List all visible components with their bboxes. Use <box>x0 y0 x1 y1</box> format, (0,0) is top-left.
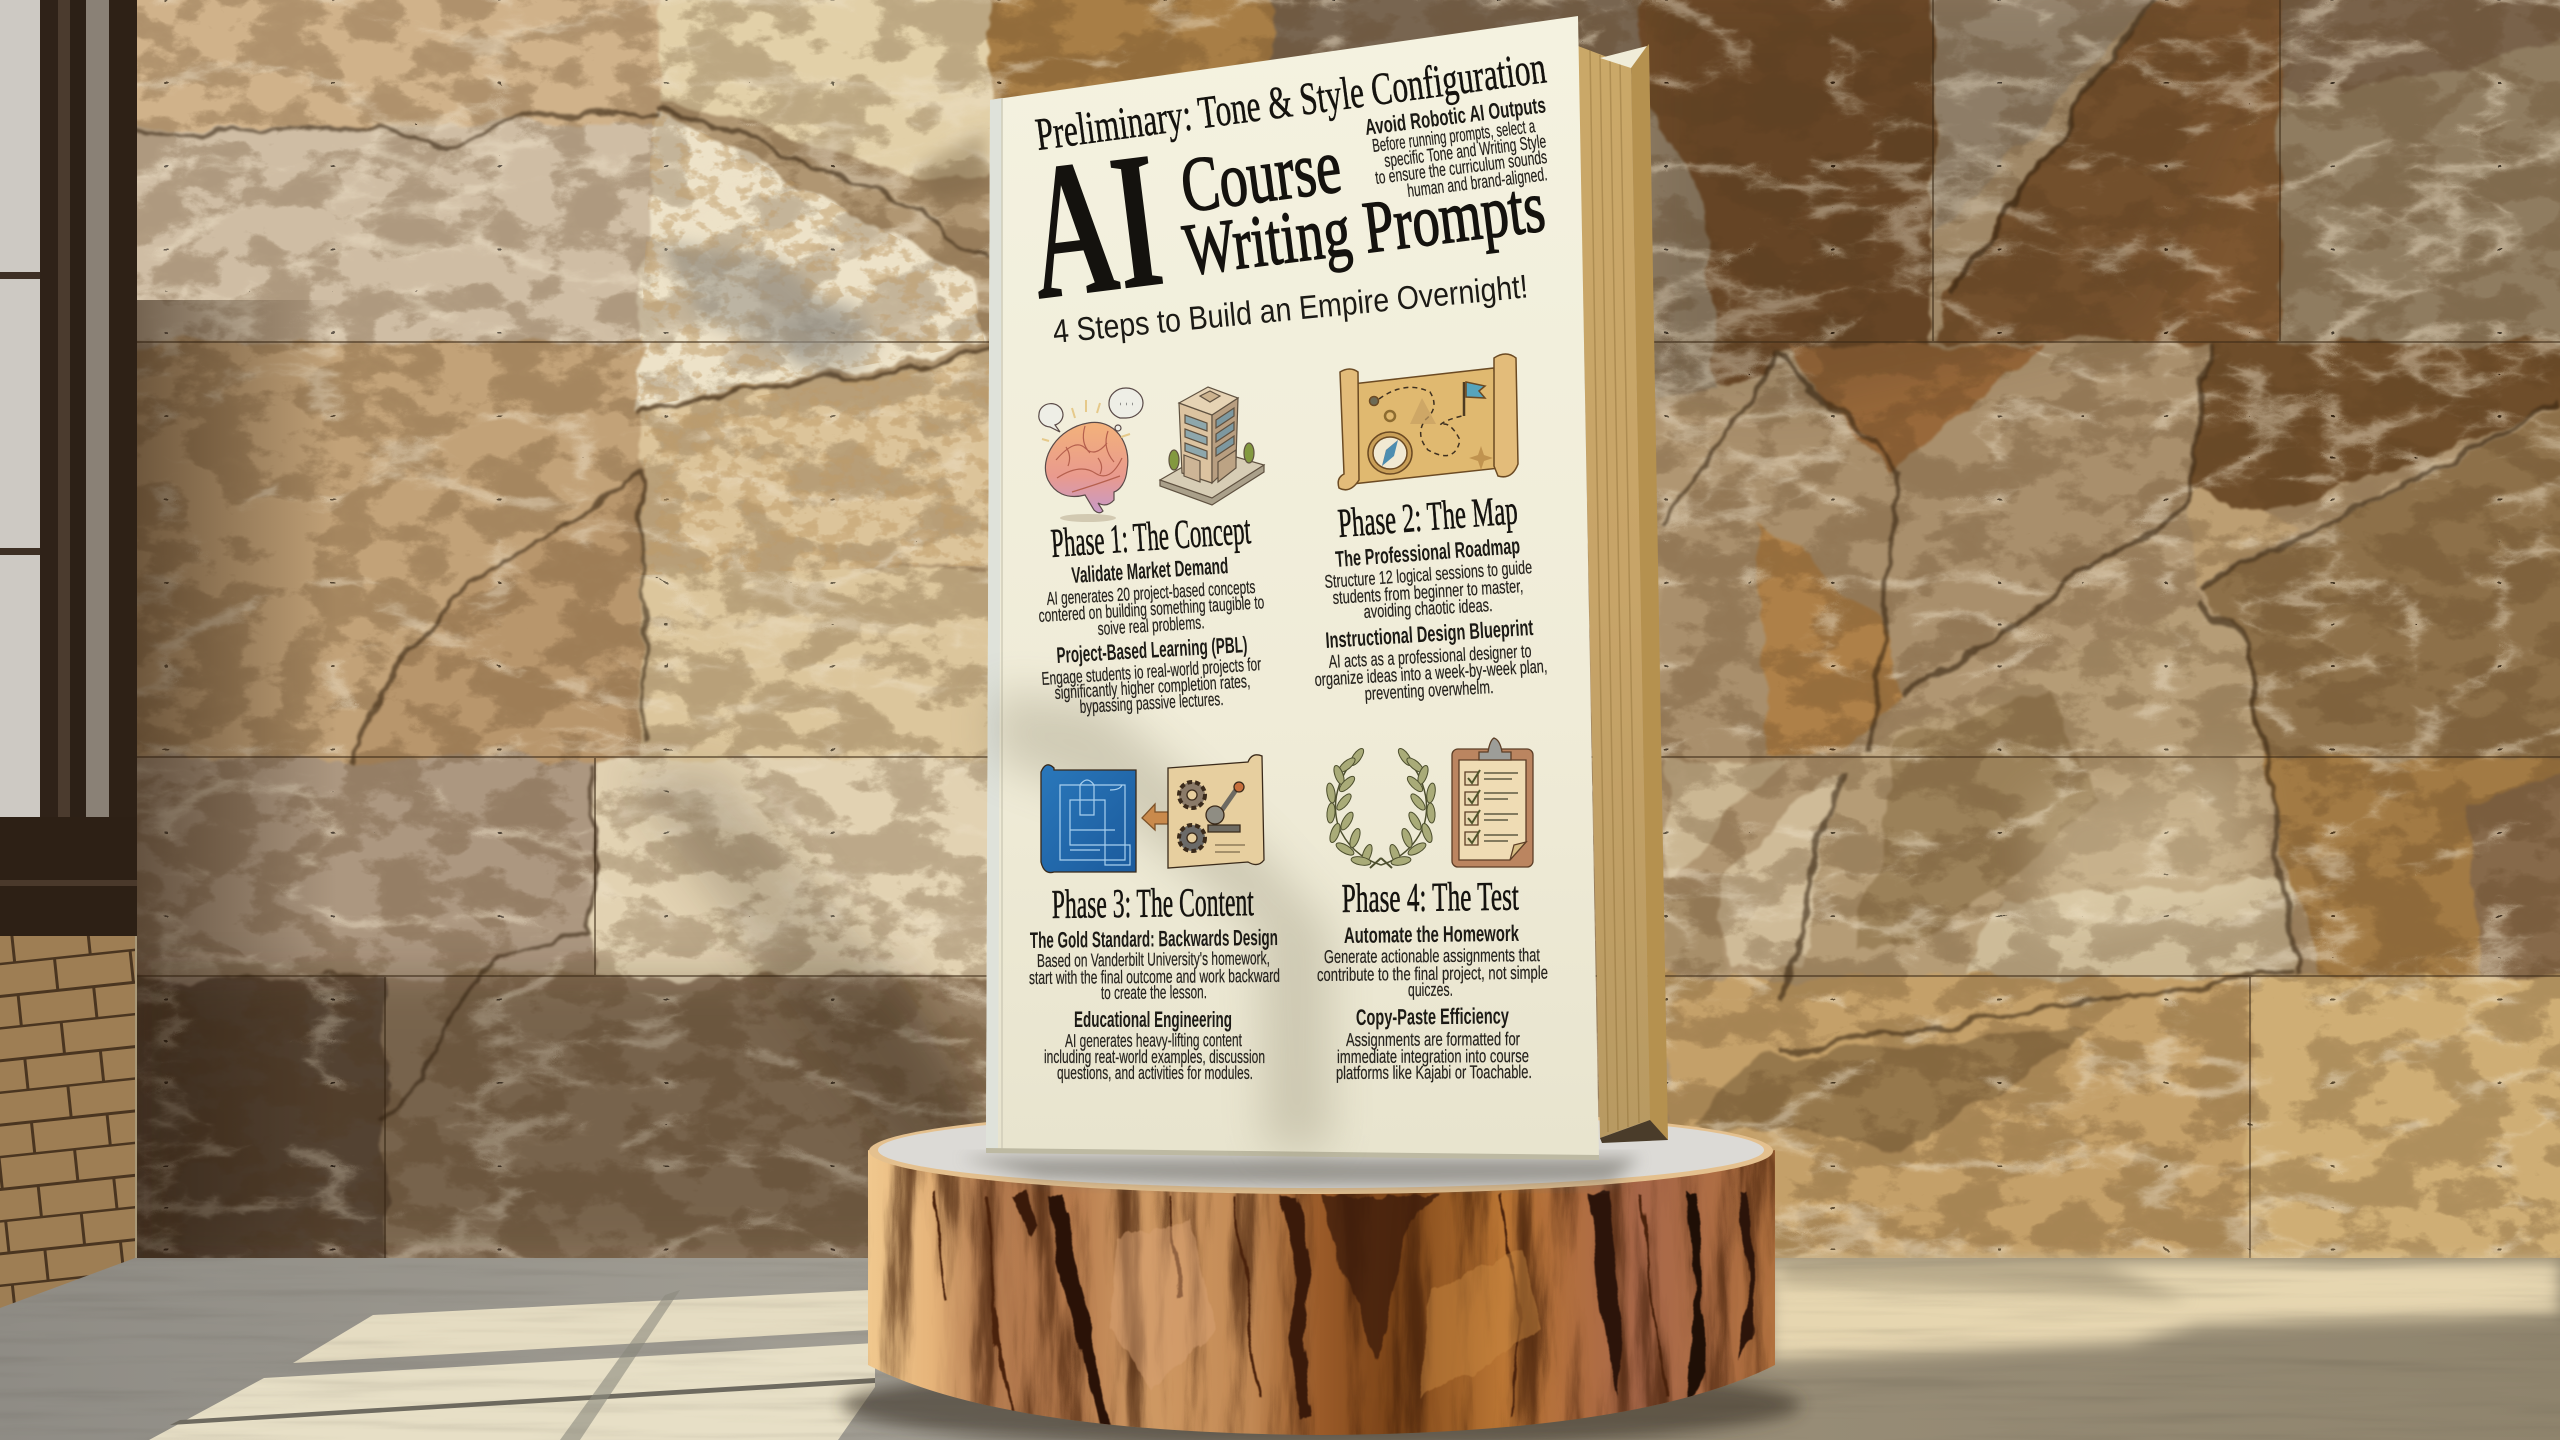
text block: phase 2 details <box>1314 533 1548 704</box>
icon: clipboard checklist <box>1452 738 1533 867</box>
heading: phase 4: Phase 4: The Test <box>1341 873 1519 921</box>
text block: phase 4 details: Automate the Homework <box>1344 921 1519 948</box>
text block: phase 1 details: soive real problems. <box>1097 611 1205 639</box>
text block: phase 2 details: students from beginner to master, <box>1332 575 1524 608</box>
wooden stump pedestal <box>860 1108 1785 1440</box>
text block: phase 2 details: Instructional Design Blueprint <box>1325 615 1534 653</box>
icon: office building <box>1160 387 1264 505</box>
heading: phase 3: Phase 3: The Content <box>1051 878 1254 927</box>
callout: avoid robotic outputs: specific Tone and Writing Style <box>1383 130 1547 171</box>
book back cover <box>1631 44 1668 1140</box>
title: AI Course Writing Prompts: AI <box>1017 110 1172 342</box>
page block <box>1578 46 1668 1143</box>
text block: phase 4 details <box>1317 921 1548 1083</box>
text block: phase 3 details: including reat-world examples, discussion <box>1044 1046 1265 1067</box>
text block: phase 2 details: avoiding chaotic ideas. <box>1363 594 1493 622</box>
callout: avoid robotic outputs: Before running prompts, select a <box>1371 115 1537 156</box>
text block: phase 1 details: Project-Based Learning (PBL) <box>1056 632 1248 668</box>
text block: phase 4 details: Generate actionable assignments that <box>1324 944 1540 967</box>
text block: phase 4 details: Copy-Paste Efficiency <box>1356 1003 1509 1030</box>
text block: phase 4 details: contribute to the final project, not simple <box>1317 962 1548 985</box>
text block: phase 1 details: contered on building something taugible to <box>1038 591 1265 626</box>
text block: phase 1 details: AI generates 20 project-based concepts <box>1046 576 1256 609</box>
text block: phase 3 details: AI generates heavy-lifting content <box>1065 1029 1242 1051</box>
callout: avoid robotic outputs: to ensure the curriculum sounds <box>1374 146 1548 188</box>
text block: phase 4 details: immediate integration into course <box>1337 1045 1529 1067</box>
text block: phase 2 details: preventing overwhelm. <box>1364 676 1494 704</box>
text block: phase 1 details: Validate Market Demand <box>1071 553 1229 588</box>
text block: phase 4 details: platforms like Kajabi or Toachable. <box>1336 1061 1532 1083</box>
text block: phase 3 details: The Gold Standard: Backwards Design <box>1030 925 1278 953</box>
text block: phase 3 details <box>1029 925 1280 1083</box>
subtitle: 4 Steps to Build an Empire Overnight! <box>1051 267 1529 350</box>
text block: phase 3 details: Based on Vanderbilt University's homework, <box>1037 947 1270 971</box>
icon: blueprint, arrow and gears <box>1041 755 1264 873</box>
callout: avoid robotic outputs: Avoid Robotic AI Outputs <box>1363 92 1547 140</box>
text block: phase 3 details: start with the final outcome and work backward <box>1029 965 1280 988</box>
text block: phase 3 details: questions, and activities for modules. <box>1057 1062 1253 1083</box>
text block: phase 4 details: Assignments are formatted for <box>1346 1028 1520 1050</box>
callout: avoid robotic outputs <box>1363 92 1548 201</box>
front cover <box>986 16 1599 1160</box>
text block: phase 4 details: quiczes. <box>1408 979 1453 1000</box>
text block: phase 2 details: AI acts as a professional designer to <box>1328 640 1532 672</box>
title: AI Course Writing Prompts: Course <box>1176 121 1346 229</box>
icon: brain with speech bubbles <box>1039 388 1143 522</box>
text block: phase 1 details <box>1038 553 1265 717</box>
floor with window light <box>0 1258 2560 1440</box>
callout: avoid robotic outputs: human and brand-aligned. <box>1406 163 1548 201</box>
brick wall under window <box>0 936 135 1308</box>
text block: phase 2 details: The Professional Roadmap <box>1335 533 1521 572</box>
heading: preliminary configuration: Preliminary: Tone & Style Configuration <box>1033 41 1549 160</box>
text block: phase 1 details: Engage students io real-world projects for <box>1041 653 1262 689</box>
icon: treasure map with compass <box>1338 354 1518 490</box>
text block: phase 3 details: Educational Engineering <box>1074 1007 1232 1032</box>
title: AI Course Writing Prompts: Writing Prompts <box>1179 166 1549 292</box>
title: AI Course Writing Prompts <box>1017 110 1549 342</box>
icon: laurel wreath <box>1325 747 1437 868</box>
heading: phase 2: Phase 2: The Map <box>1336 486 1519 546</box>
window frame <box>0 0 137 936</box>
book <box>986 16 1668 1160</box>
text block: phase 2 details: Structure 12 logical sessions to guide <box>1324 556 1533 592</box>
text block: phase 2 details: organize ideas into a week-by-week plan, <box>1314 655 1548 690</box>
heading: phase 1: Phase 1: The Concept <box>1049 506 1252 566</box>
text block: phase 3 details: to create the lesson. <box>1101 981 1207 1003</box>
text block: phase 1 details: significantly higher completion rates, <box>1054 670 1251 703</box>
text block: phase 1 details: bypassing passive lectures. <box>1079 688 1224 717</box>
cover light and shadow <box>992 690 1330 1150</box>
